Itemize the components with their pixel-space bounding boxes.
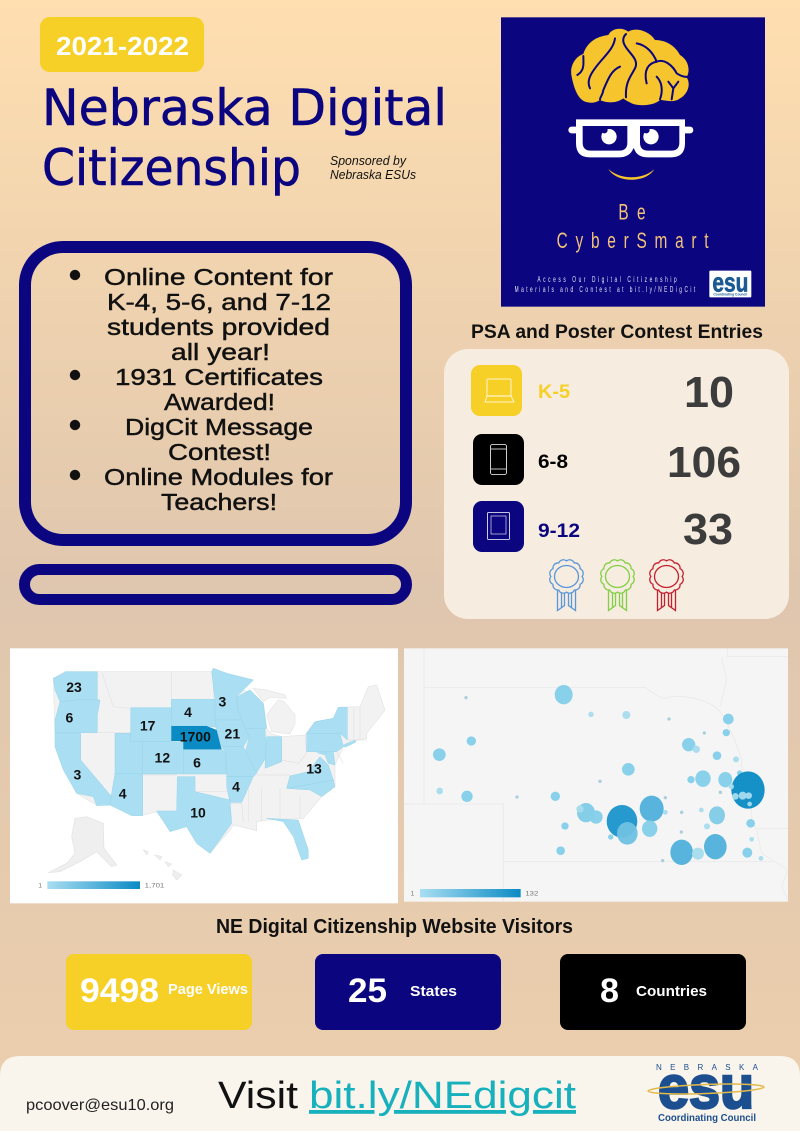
website link: Visit — [218, 1075, 298, 1117]
state values: 4 — [119, 786, 127, 802]
stat card: countries: 8 — [600, 972, 619, 1010]
icon: smile — [608, 169, 654, 180]
state values: 6 — [65, 710, 73, 726]
poster headline: CyberSmart — [557, 229, 709, 254]
poster ESU logo: Coordinating Council — [713, 293, 747, 297]
title: Nebraska Digital — [42, 79, 447, 137]
panel: program highlights — [25, 247, 406, 540]
icon: laptop — [471, 365, 522, 416]
state values: 10 — [190, 805, 206, 821]
state values: 23 — [66, 679, 82, 695]
contest heading: PSA and Poster Contest Entries — [471, 322, 763, 343]
bullet list: Online Modules for — [104, 464, 333, 490]
value 33: 33 — [683, 505, 733, 554]
date badge: 2021-2022 — [56, 31, 189, 61]
website link: bit.ly/NEdigcit — [309, 1075, 576, 1117]
panel: contest entries — [444, 349, 789, 619]
stat card: countries — [560, 954, 746, 1030]
website visitors heading: NE Digital Citizenship Website Visitors — [216, 916, 573, 938]
date badge — [40, 17, 204, 72]
ESU logo: esu — [658, 1054, 754, 1121]
poster: Be CyberSmart — [501, 17, 765, 307]
map legend: 1 — [38, 882, 42, 889]
state values: 3 — [218, 693, 226, 709]
bullet list: K-4, 5-6, and 7-12 — [107, 289, 331, 315]
state values: 4 — [232, 779, 240, 795]
stat card: page views: Page Views — [168, 981, 248, 998]
icon: ribbon green — [601, 560, 634, 610]
stat card: page views: 9498 — [80, 972, 159, 1010]
website link — [218, 1075, 576, 1117]
label K-5: K-5 — [538, 382, 570, 403]
ESU logo: NEBRASKA — [656, 1063, 759, 1072]
icon: ribbon red — [650, 560, 683, 610]
footer — [0, 1054, 800, 1131]
base bar of laptop frame — [24, 570, 406, 600]
sponsor note — [330, 153, 416, 182]
value 10: 10 — [684, 368, 734, 417]
ESU logo: Coordinating Council — [658, 1113, 756, 1124]
state values: 1700 — [180, 729, 211, 745]
bubbles — [433, 685, 765, 865]
state values: 13 — [306, 761, 322, 777]
stat card: page views — [66, 954, 252, 1030]
bullet list: Contest! — [168, 439, 271, 465]
state values: 12 — [155, 749, 170, 765]
label 6-8: 6-8 — [538, 452, 568, 473]
state values: 4 — [184, 704, 192, 720]
Nebraska — [171, 726, 222, 749]
stat card: states: States — [410, 983, 457, 1000]
poster ESU logo: esu — [712, 267, 748, 297]
poster caption — [515, 276, 695, 294]
bullet list: DigCit Message — [125, 414, 313, 440]
bullet list: students provided — [107, 314, 330, 340]
icon: glasses — [568, 119, 693, 157]
bubble legend: 1 — [411, 890, 415, 897]
value 106: 106 — [667, 438, 741, 487]
poster caption: Materials and Contest at bit.ly/NEDigCit — [515, 286, 695, 294]
title — [42, 79, 447, 197]
label 9-12: 9-12 — [538, 521, 580, 542]
title: Citizenship — [42, 139, 301, 197]
poster headline: Be — [618, 201, 646, 225]
sponsor note: Sponsored by — [330, 153, 407, 168]
icon: brain — [571, 29, 689, 105]
map legend: 1,701 — [145, 882, 165, 889]
state values — [65, 679, 322, 821]
icon: ribbon blue — [550, 560, 583, 610]
state values: 3 — [73, 766, 81, 782]
poster headline — [557, 201, 709, 254]
bubble legend — [411, 889, 539, 897]
contact email: pcoover@esu10.org — [26, 1097, 174, 1114]
bullet list: 1931 Certificates — [115, 364, 323, 390]
bullet list: Online Content for — [104, 264, 333, 290]
bullet list: Awarded! — [164, 389, 275, 415]
state values: 21 — [225, 726, 240, 742]
poster caption: Access Our Digital Citizenship — [537, 276, 677, 284]
bullet list: all year! — [171, 339, 270, 365]
icon: phone — [473, 434, 524, 485]
state values: 17 — [140, 718, 156, 734]
stat card: states — [315, 954, 501, 1030]
sponsor note: Nebraska ESUs — [330, 167, 416, 182]
state values: 6 — [193, 755, 201, 771]
chart: Nebraska visitors bubble map — [404, 648, 788, 902]
gray land — [53, 668, 385, 853]
icon: tablet — [473, 501, 524, 552]
stat card: countries: Countries — [636, 983, 707, 1000]
map legend — [38, 881, 165, 889]
stat card: states: 25 — [348, 972, 387, 1010]
Alaska and Hawaii — [48, 817, 182, 880]
bullet list: Teachers! — [161, 489, 277, 515]
chart: US visitors map — [10, 648, 398, 903]
bullet list — [70, 264, 333, 515]
bubble legend: 132 — [525, 890, 539, 897]
blue states — [53, 668, 356, 860]
